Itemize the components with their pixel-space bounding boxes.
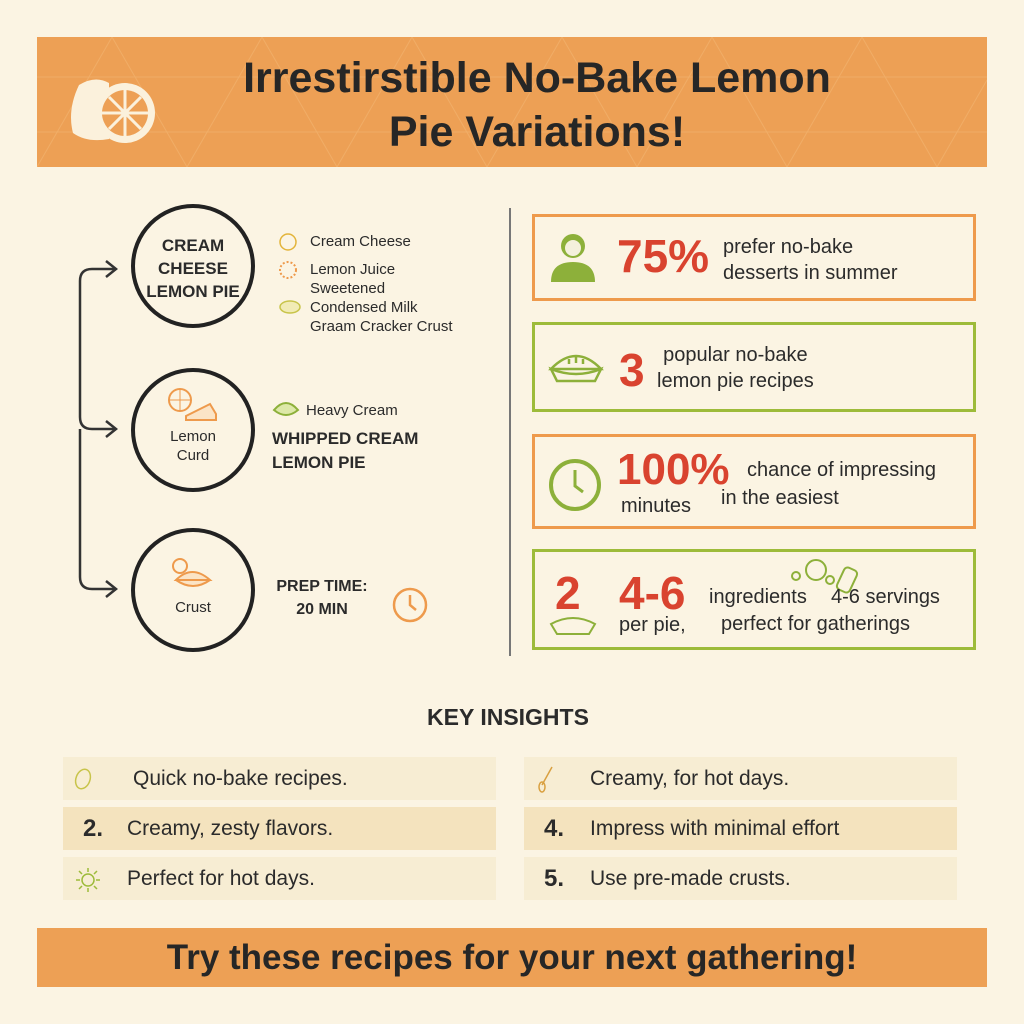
text: Heavy Cream — [306, 402, 398, 419]
stat: 2 / 4-6: 2 — [555, 567, 581, 619]
icon: lemon small — [279, 233, 297, 251]
ingredients list: Sweetened — [310, 280, 385, 297]
circle: lemon curd: Curd — [177, 447, 209, 464]
icon: lemon — [71, 80, 155, 143]
stat: 3 — [532, 322, 976, 412]
divider — [509, 208, 511, 656]
ingredients list: Graam Cracker Crust — [310, 318, 453, 335]
stat: 2 / 4-6 — [532, 549, 976, 650]
icon: clock — [392, 588, 428, 622]
stat: 100% — [532, 434, 976, 529]
circle: cream cheese lemon pie — [131, 204, 255, 328]
insight 4 — [524, 757, 957, 800]
insight 5 — [524, 807, 957, 850]
stat: 100%: in the easiest — [721, 487, 839, 509]
ingredients list: Cream Cheese — [310, 233, 411, 250]
title: Pie Variations! — [389, 108, 685, 156]
prep time: 20 MIN — [296, 601, 348, 618]
header banner — [37, 37, 987, 167]
stat: 75%: desserts in summer — [723, 262, 898, 284]
stat: 2 / 4-6: perfect for gatherings — [721, 613, 910, 635]
stat: 75% — [532, 214, 976, 301]
stat: 3: lemon pie recipes — [657, 370, 814, 392]
ingredients list: Condensed Milk — [310, 299, 418, 316]
insight 2: Creamy, zesty flavors. — [127, 817, 333, 840]
text: WHIPPED CREAM — [272, 429, 418, 448]
circle: lemon curd: Lemon — [170, 428, 216, 445]
stat: 2 / 4-6: ingredients — [709, 586, 807, 608]
stat: 100%: chance of impressing — [747, 459, 936, 481]
title — [243, 54, 831, 156]
insight 6: 5. — [544, 865, 564, 892]
insight 6 — [524, 857, 957, 900]
stat: 2 / 4-6: 4-6 — [619, 567, 685, 619]
insight 1 — [63, 757, 496, 800]
flow connector arrows — [78, 260, 118, 598]
insight 5: Impress with minimal effort — [590, 817, 839, 840]
stat: 2 / 4-6: per pie, — [619, 614, 686, 636]
insight 3: Perfect for hot days. — [127, 867, 315, 890]
prep time — [276, 578, 368, 618]
footer banner: Try these recipes for your next gathering! — [167, 938, 857, 977]
circle: lemon curd — [131, 368, 255, 492]
stat: 3: popular no-bake — [663, 344, 808, 366]
whipped cream text — [272, 402, 418, 472]
insight 3 — [63, 857, 496, 900]
stat: 75%: 75% — [617, 230, 709, 282]
title: Irrestirstible No-Bake Lemon — [243, 54, 831, 102]
text: LEMON PIE — [272, 453, 366, 472]
circle: crust: Crust — [175, 599, 211, 616]
key insights heading: KEY INSIGHTS — [427, 704, 589, 730]
footer banner — [37, 928, 987, 987]
insight 4: Creamy, for hot days. — [590, 767, 789, 790]
insights list — [63, 757, 957, 900]
stat: 2 / 4-6: 4-6 servings — [831, 586, 940, 608]
stat: 100%: minutes — [621, 495, 691, 517]
stat: 100%: 100% — [617, 445, 730, 494]
ingredients list: Lemon Juice — [310, 261, 395, 278]
ingredients list — [279, 233, 453, 335]
stat: 3: 3 — [619, 344, 645, 396]
insight 1: Quick no-bake recipes. — [133, 767, 348, 790]
insight 2 — [63, 807, 496, 850]
insight 5: 4. — [544, 815, 564, 842]
circle: cream cheese lemon pie: CHEESE — [158, 259, 228, 278]
circle: cream cheese lemon pie: CREAM — [162, 236, 224, 255]
circle: cream cheese lemon pie: LEMON PIE — [146, 282, 240, 301]
circle: crust — [131, 528, 255, 652]
prep time: PREP TIME: — [276, 578, 368, 595]
stat: 75%: prefer no-bake — [723, 236, 853, 258]
insight 6: Use pre-made crusts. — [590, 867, 791, 890]
insight 2: 2. — [83, 815, 103, 842]
